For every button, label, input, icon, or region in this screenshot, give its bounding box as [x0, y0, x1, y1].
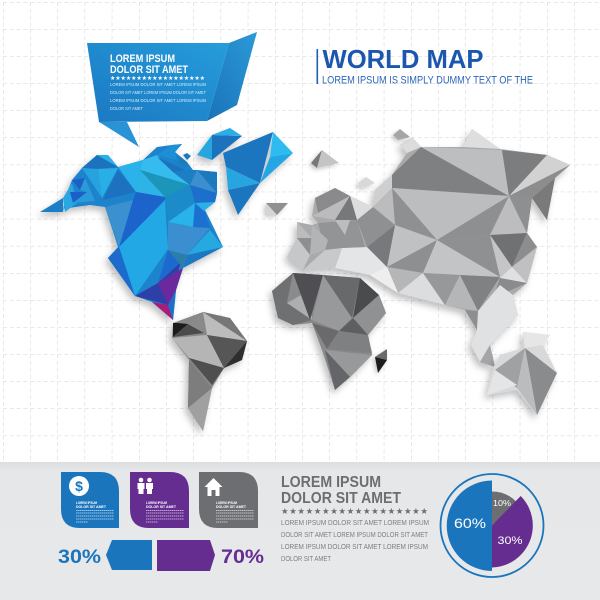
- speech bubble callout: [87, 32, 257, 147]
- text block: lorem ipsum: DOLOR SIT AMET: [281, 554, 331, 563]
- card: finance: [61, 472, 119, 528]
- speech bubble callout: ★★★★★★★★★★★★★★★★★★: [110, 75, 205, 82]
- speech bubble callout: LOREM IPSUM DOLOR SIT AMET LOREM IPSUM: [110, 98, 206, 103]
- speech bubble callout: LOREM IPSUM DOLOR SIT AMET LOREM IPSUM: [110, 82, 206, 87]
- title: [316, 44, 533, 86]
- card: home: [199, 472, 258, 528]
- text block: lorem ipsum: LOREM IPSUM: [281, 474, 381, 491]
- title: WORLD MAP: [322, 44, 484, 74]
- pie chart: 60%: [454, 515, 486, 531]
- map: northern islands and Greenland: [183, 128, 293, 215]
- card: home: DOLOR SIT AMET: [216, 505, 247, 509]
- stat: 30 percent: [58, 540, 152, 570]
- text block: lorem ipsum: DOLOR SIT AMET: [281, 490, 401, 507]
- speech bubble callout: DOLOR SIT AMET: [110, 64, 188, 76]
- card: home: LOREM IPSUM: [216, 501, 237, 505]
- card: finance: DOLOR SIT AMET: [76, 505, 107, 509]
- speech bubble callout: LOREM IPSUM: [110, 53, 175, 65]
- card: people: [130, 472, 189, 528]
- pie chart: 30%: [498, 535, 523, 547]
- title: LOREM IPSUM IS SIMPLY DUMMY TEXT OF THE: [322, 74, 533, 86]
- text block: lorem ipsum: DOLOR SIT AMET LOREM IPSUM DOLOR SIT AMET: [281, 530, 428, 539]
- card: people: LOREM IPSUM: [146, 501, 167, 505]
- pie chart: 10%: [493, 499, 511, 508]
- stat: 70 percent: [157, 540, 264, 571]
- icon: dollar: $: [75, 478, 83, 494]
- stat: 30 percent: 30%: [58, 546, 101, 568]
- map: Australia: [487, 332, 557, 415]
- map: Eurasia: [287, 129, 570, 367]
- map: North America: [40, 144, 223, 320]
- stat: 70 percent: 70%: [221, 546, 264, 568]
- card: people: DOLOR SIT AMET: [146, 505, 177, 509]
- icon: people: [138, 478, 153, 494]
- speech bubble callout: DOLOR SIT AMET LOREM IPSUM DOLOR SIT AMET: [110, 90, 206, 95]
- text block: lorem ipsum: LOREM IPSUM DOLOR SIT AMET LOREM IPSUM: [281, 542, 428, 551]
- text block: lorem ipsum: ★★★★★★★★★★★★★★★★★★: [281, 507, 428, 517]
- speech bubble callout: DOLOR SIT AMET: [110, 106, 143, 111]
- map: small Europe islands: [266, 129, 410, 215]
- map: South America: [172, 312, 247, 431]
- card: finance: LOREM IPSUM: [76, 501, 97, 505]
- map: Africa: [272, 273, 386, 390]
- map: Madagascar: [375, 349, 387, 373]
- text block: lorem ipsum: [281, 474, 429, 563]
- text block: lorem ipsum: LOREM IPSUM DOLOR SIT AMET LOREM IPSUM: [281, 518, 429, 527]
- icon: house: [204, 478, 222, 496]
- pie chart: [440, 474, 544, 577]
